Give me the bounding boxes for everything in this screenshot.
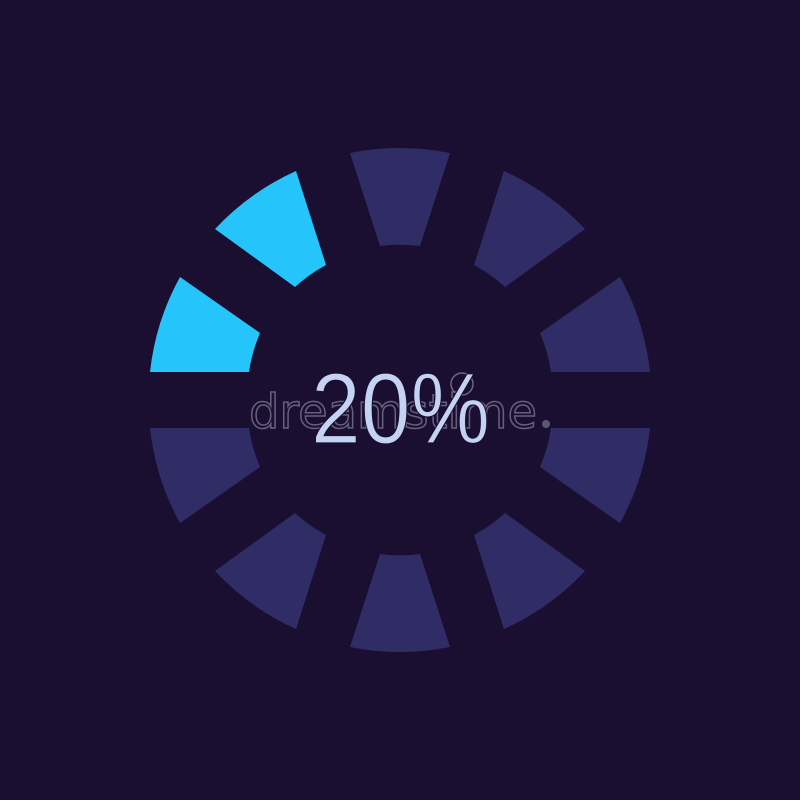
segment: bottom bbox=[350, 554, 450, 652]
segment: top bbox=[350, 148, 450, 246]
percentage label: 20% bbox=[311, 353, 490, 465]
segment: lower left bbox=[215, 513, 326, 629]
progress ring bbox=[150, 148, 650, 652]
segment: active lower left bbox=[150, 277, 260, 372]
watermark: dreamstime bbox=[249, 385, 537, 440]
segment: active upper left bbox=[215, 171, 326, 287]
segment: upper right bbox=[474, 171, 585, 287]
segment: lower right bbox=[474, 513, 585, 629]
segment: right upper bbox=[540, 277, 650, 372]
segment: right lower bbox=[540, 428, 650, 523]
segment: left lower bbox=[150, 428, 260, 523]
